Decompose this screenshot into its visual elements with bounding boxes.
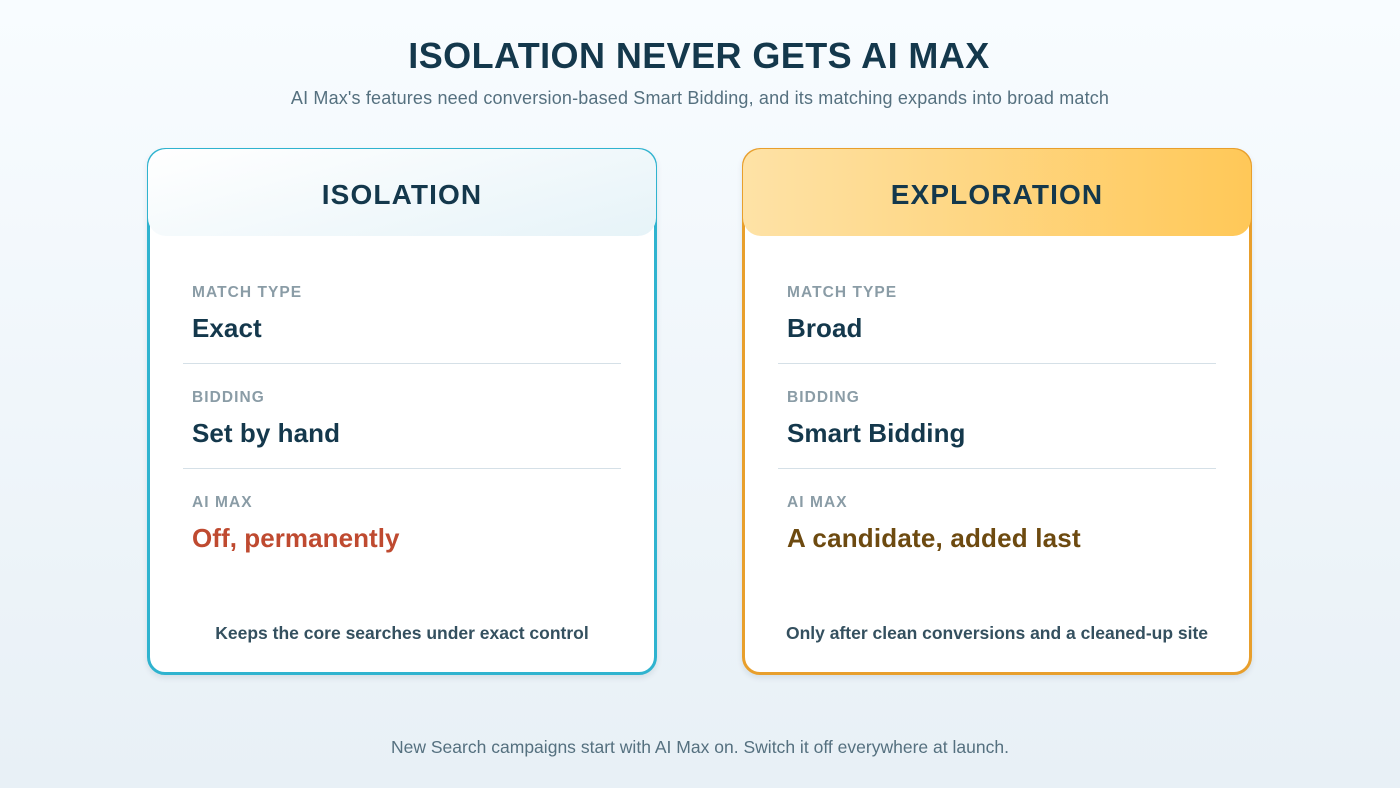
row: match type	[183, 261, 621, 364]
panel heading: isolation	[148, 149, 656, 236]
panel heading: exploration: EXPLORATION	[891, 179, 1103, 210]
row: bidding: Smart Bidding	[787, 418, 965, 448]
row: match type: MATCH TYPE	[787, 284, 897, 301]
row: match type: Broad	[787, 313, 862, 343]
panel note: exploration: Only after clean conversions and a cleaned-up site	[786, 623, 1208, 643]
row: AI Max	[192, 494, 400, 553]
row: match type: MATCH TYPE	[192, 284, 302, 301]
panel heading: exploration	[743, 149, 1251, 236]
row: AI Max: AI MAX	[787, 494, 848, 511]
row: match type	[778, 261, 1216, 364]
row: AI Max	[787, 494, 1081, 553]
panel heading: isolation: ISOLATION	[322, 179, 482, 210]
panel note: isolation: Keeps the core searches under exact control	[215, 623, 589, 643]
panel: isolation	[147, 148, 657, 675]
row: AI Max: AI MAX	[192, 494, 253, 511]
title: ISOLATION NEVER GETS AI MAX	[408, 35, 990, 76]
row: bidding: Set by hand	[192, 418, 340, 448]
row: match type: Exact	[192, 313, 262, 343]
row: bidding	[183, 366, 621, 469]
row: bidding: BIDDING	[787, 389, 860, 406]
footer note: New Search campaigns start with AI Max on. Switch it off everywhere at launch.	[391, 737, 1009, 757]
row: bidding: BIDDING	[192, 389, 265, 406]
row: bidding	[778, 366, 1216, 469]
subtitle: AI Max's features need conversion-based Smart Bidding, and its matching expands into broad match	[291, 88, 1109, 108]
panel: exploration	[742, 148, 1252, 675]
row: AI Max: Off, permanently	[192, 523, 400, 553]
row: AI Max: A candidate, added last	[787, 523, 1081, 553]
